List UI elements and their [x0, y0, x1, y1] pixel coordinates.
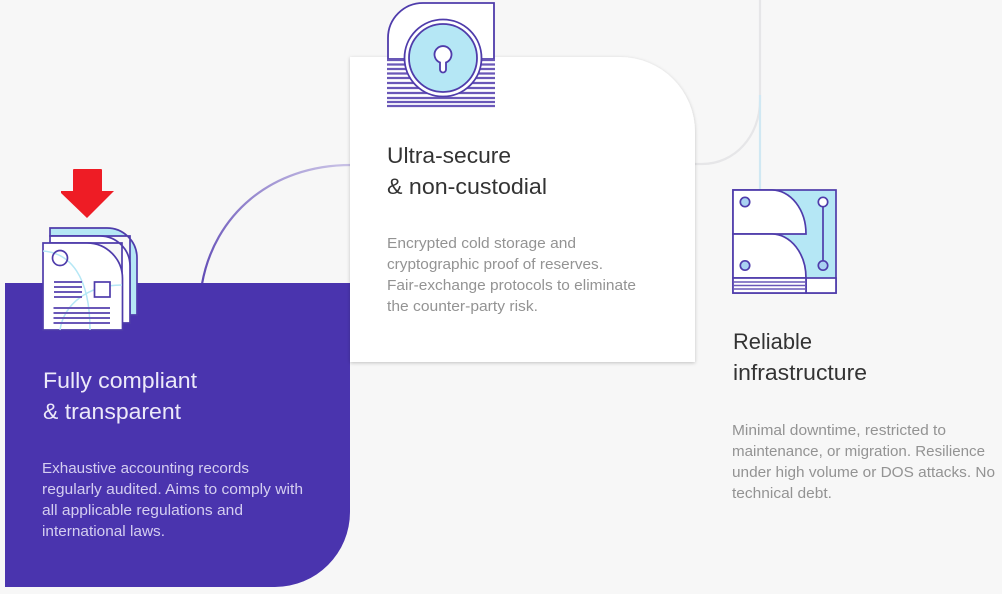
panel: fully compliant and transparent [5, 283, 350, 587]
text: security description: cryptographic proof of reserves. [387, 257, 603, 273]
text: security description: Fair-exchange protocols to eliminate [387, 278, 636, 294]
icon: red arrow [61, 169, 114, 218]
heading: ultra-secure: Ultra-secure [387, 143, 511, 168]
heading: ultra-secure: & non-custodial [387, 174, 547, 199]
text: security description: Encrypted cold storage and [387, 236, 576, 252]
panel: reliable infrastructure [732, 329, 995, 502]
heading: reliable infrastructure: infrastructure [733, 360, 867, 385]
text: infrastructure description [732, 423, 995, 502]
heading: fully compliant [43, 368, 197, 424]
text: security description [387, 236, 636, 315]
panel: ultra-secure and non-custodial [350, 57, 695, 362]
text: infrastructure description: technical debt. [732, 486, 832, 502]
connector: purple card to white card [202, 165, 351, 284]
connector: white card to infrastructure icon [695, 0, 760, 190]
icon: documents [43, 228, 137, 330]
text: compliance description: international laws. [42, 524, 165, 540]
text: infrastructure description: maintenance, or migration. Resilience [732, 444, 985, 460]
heading: fully compliant: Fully compliant [43, 368, 197, 393]
heading: reliable infrastructure [733, 329, 867, 385]
text: infrastructure description: under high volume or DOS attacks. No [732, 465, 995, 481]
text: compliance description: all applicable regulations and [42, 503, 243, 519]
text: compliance description: regularly audited. Aims to comply with [42, 482, 303, 498]
heading: reliable infrastructure: Reliable [733, 329, 812, 354]
heading: fully compliant: & transparent [43, 399, 181, 424]
text: security description: the counter-party risk. [387, 299, 538, 315]
icon: server infrastructure [733, 190, 836, 293]
text: infrastructure description: Minimal downtime, restricted to [732, 423, 946, 439]
text: compliance description: Exhaustive accounting records [42, 461, 249, 477]
text: compliance description [42, 461, 303, 540]
heading: ultra-secure [387, 143, 547, 199]
icon: keyhole safe [387, 3, 495, 106]
